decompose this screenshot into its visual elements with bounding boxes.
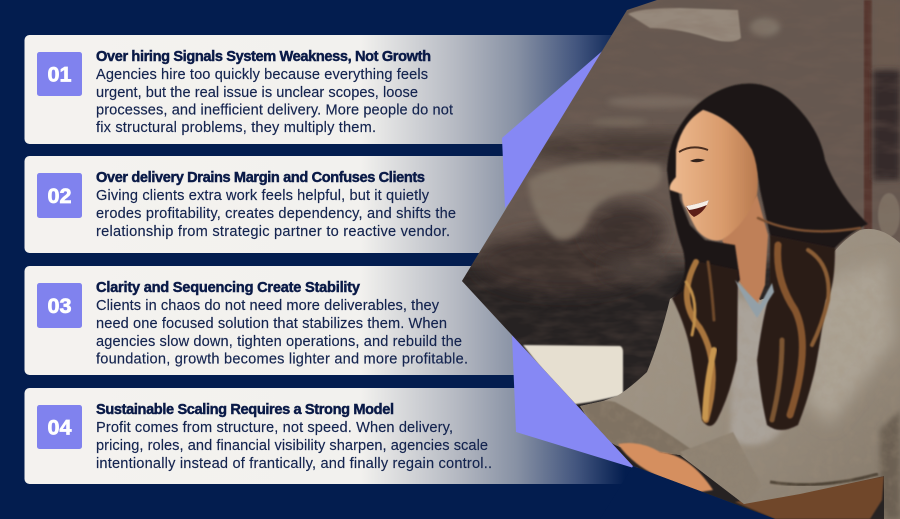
panel: card 02 (24, 156, 626, 253)
photo neck (722, 195, 768, 305)
card 03 background (24, 266, 626, 375)
card 02 body text (96, 188, 456, 240)
card 02 body text: Giving clients extra work feels helpful, but it quietly (96, 188, 430, 204)
panel: card 04 (24, 388, 626, 484)
photo smile (686, 200, 709, 217)
bottom navy corner wedge (600, 466, 775, 519)
card 04 heading: Sustainable Scaling Requires a Strong Model (96, 402, 394, 418)
card 01 body text (96, 67, 453, 136)
card 03 number badge (37, 283, 82, 328)
card 03 body text: foundation, growth becomes lighter and more profitable. (96, 352, 468, 368)
card 04 background (24, 388, 626, 484)
photo table (735, 476, 884, 519)
photo sweater (570, 220, 900, 519)
card 03 body text: agencies slow down, tighten operations, and rebuild the (96, 334, 462, 350)
card 04 body text (96, 420, 492, 472)
card 02 heading: Over delivery Drains Margin and Confuses Clients (96, 170, 425, 186)
photo right lock of hair (757, 218, 860, 430)
photo left lock of hair (672, 262, 738, 426)
card 01 body text: Agencies hire too quickly because everything feels (96, 67, 428, 83)
photo shirt collar (735, 280, 774, 318)
panel: card 01 (24, 35, 626, 144)
photo chair (523, 345, 623, 405)
card 01 heading: Over hiring Signals System Weakness, Not Growth (96, 49, 431, 65)
photo eye and brow (679, 147, 708, 162)
card 04 number badge: 04 (48, 416, 72, 440)
photo face (670, 110, 758, 241)
card 01 body text: urgent, but the real issue is unclear scopes, loose (96, 85, 418, 101)
panel: card 03 (24, 266, 626, 375)
card 04 number badge (37, 405, 82, 449)
card 03 number badge: 03 (48, 295, 72, 318)
card 01 body text: processes, and inefficient delivery. More people do not (96, 102, 453, 118)
card 02 number badge (37, 173, 82, 218)
card 04 body text: intentionally instead of frantically, and finally regain control.. (96, 456, 492, 472)
card 04 body text: pricing, roles, and financial visibility sharpen, agencies scale (96, 438, 488, 454)
photo dark hair crown (667, 84, 868, 298)
card 02 number badge: 02 (48, 185, 72, 208)
accent: lower purple shard (512, 335, 640, 470)
card 03 heading: Clarity and Sequencing Create Stability (96, 280, 361, 296)
card 02 background (24, 156, 626, 253)
card 01 background (24, 35, 626, 144)
card 03 body text (96, 298, 468, 368)
card 02 body text: erodes profitability, creates dependency, and shifts the (96, 206, 456, 222)
card 01 number badge: 01 (48, 64, 72, 86)
card 03 body text: Clients in chaos do not need more deliverables, they (96, 298, 440, 314)
card 04 body text: Profit comes from structure, not speed. When delivery, (96, 420, 453, 436)
photo: smiling woman at a table (440, 0, 900, 519)
card 03 body text: need one focused solution that stabilizes them. When (96, 316, 447, 332)
card 01 body text: fix structural problems, they multiply them. (96, 120, 376, 136)
card 01 number badge (37, 52, 82, 96)
card 02 body text: relationship from strategic partner to reactive vendor. (96, 224, 450, 240)
photo wall (440, 0, 900, 519)
accent: upper purple shard (502, 0, 668, 208)
photo hand (618, 443, 713, 492)
